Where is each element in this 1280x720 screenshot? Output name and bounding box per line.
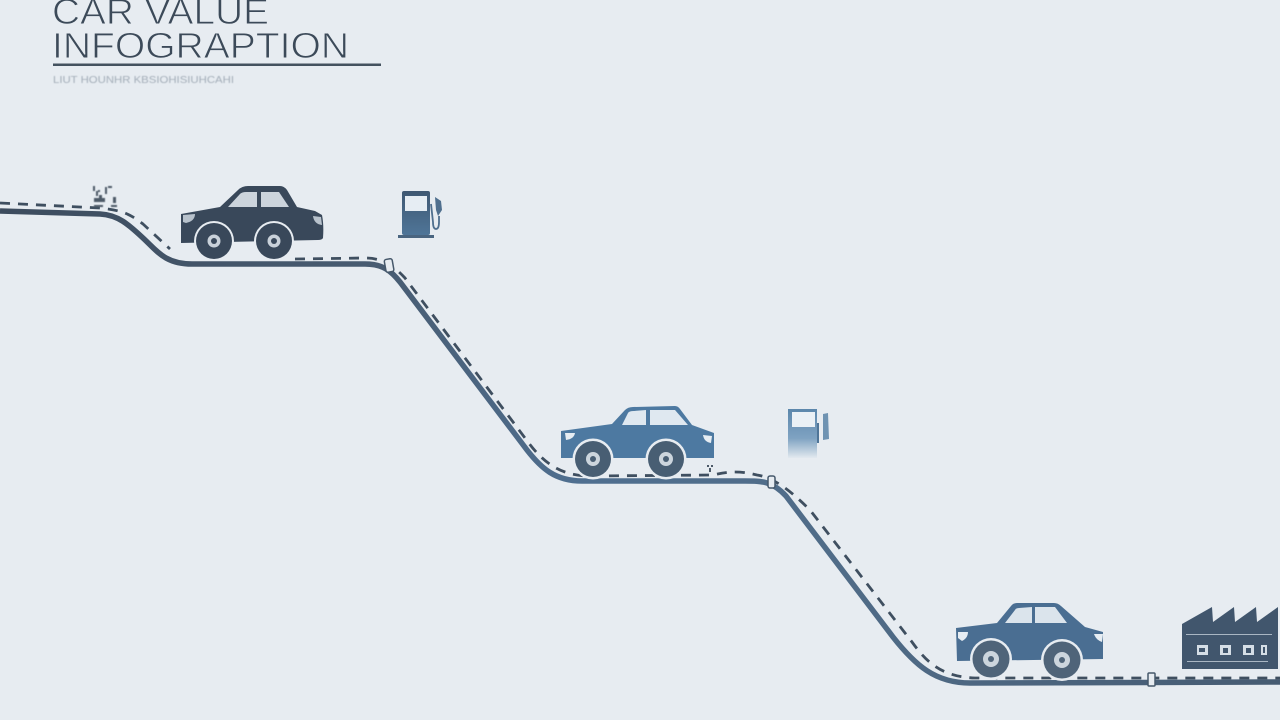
icon: small debris marker [93, 186, 117, 207]
wheels [196, 223, 292, 259]
car 2 [561, 406, 714, 480]
car 3 [956, 603, 1103, 681]
subtitle: LIUT HOUNHR KBSIOHISIUHCAHI [53, 75, 234, 86]
wheels [575, 441, 684, 477]
icon: factory [1182, 607, 1278, 669]
dashed route line [0, 203, 1280, 678]
wheels [972, 640, 1080, 678]
icon: small road marker [707, 465, 713, 472]
title [52, 0, 349, 66]
road joint markers [384, 258, 1155, 686]
icon: fuel pump 2 (fading) [788, 409, 829, 458]
car 1 [181, 186, 323, 261]
title: INFOGRAPTION [52, 25, 349, 66]
road: value decline curve [0, 203, 1280, 683]
title underline [53, 64, 381, 66]
icon: fuel pump 1 [398, 191, 442, 238]
